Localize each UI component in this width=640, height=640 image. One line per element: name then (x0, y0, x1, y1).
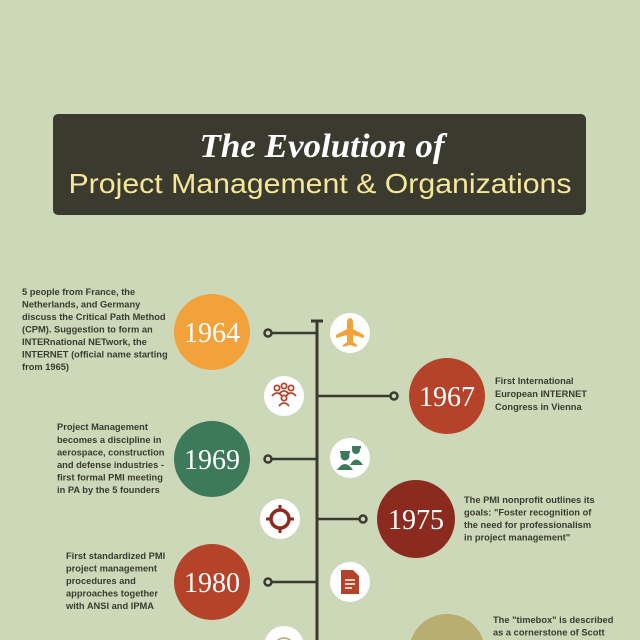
event 1980: 1980 (184, 567, 240, 599)
event 1975: The PMI nonprofit outlines its (464, 495, 595, 505)
event 1969: and defense industries - (57, 460, 164, 470)
event 1964 (22, 287, 250, 372)
event 1964: from 1965) (22, 362, 69, 372)
event 1980: procedures and (66, 576, 136, 586)
event 1969: becomes a discipline in (57, 435, 162, 445)
event 1969: aerospace, construction (57, 448, 165, 458)
event 1975: in project management" (464, 532, 570, 542)
event 1969 (57, 421, 250, 497)
event 1988 (409, 614, 614, 640)
event 1964: Netherlands, and Germany (22, 300, 141, 310)
event 1969: first formal PMI meeting (57, 472, 163, 482)
connectors (264, 330, 398, 586)
icon: clock (partial) (264, 626, 304, 640)
icon: people (264, 376, 304, 416)
event 1969: 1969 (184, 444, 240, 476)
event 1980: First standardized PMI (66, 551, 165, 561)
event 1964: discuss the Critical Path Method (22, 312, 166, 322)
icon: workers (330, 438, 370, 478)
event 1967 (409, 358, 587, 434)
event 1967: Congress in Vienna (495, 402, 582, 412)
title banner (53, 114, 586, 215)
event 1964: (CPM). Suggestion to form an (22, 324, 153, 334)
icon: plane (330, 313, 370, 353)
event 1980: with ANSI and IPMA (65, 601, 154, 611)
event 1975: 1975 (388, 504, 444, 536)
event 1980: approaches together (66, 588, 158, 598)
event 1964: 1964 (184, 317, 240, 349)
event 1967: First International (495, 376, 574, 386)
icon: target (260, 499, 300, 539)
event 1964: 5 people from France, the (22, 287, 135, 297)
event 1967: European INTERNET (495, 389, 587, 399)
event 1969: Project Management (57, 422, 148, 432)
event 1975: the need for professionalism (464, 520, 591, 530)
event 1964: INTERnational NETwork, the (22, 337, 147, 347)
event 1975: goals: "Foster recognition of (464, 508, 592, 518)
subtitle: Project Management & Organizations (68, 168, 572, 199)
event 1980 (65, 544, 250, 620)
title: The Evolution of (200, 128, 448, 165)
event 1964: INTERNET (official name starting (22, 350, 168, 360)
timeline axis (311, 321, 323, 640)
event 1988: The "timebox" is described (493, 615, 614, 625)
event 1988: as a cornerstone of Scott (493, 628, 605, 638)
icon: document (330, 562, 370, 602)
event 1967: 1967 (419, 381, 475, 413)
event 1980: project management (66, 564, 157, 574)
event 1975 (377, 480, 595, 558)
event 1969: in PA by the 5 founders (57, 485, 160, 495)
